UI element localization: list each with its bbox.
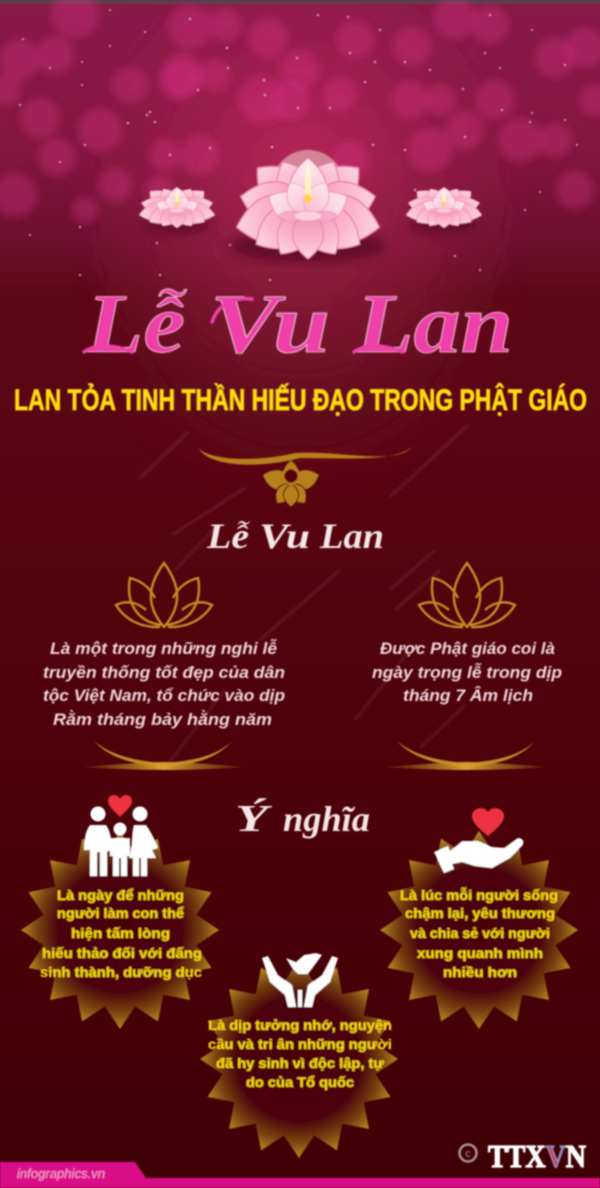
icon: gold lotus right [419, 563, 515, 627]
icon: central lotus [232, 150, 384, 263]
icon: hands with dove [262, 953, 338, 1007]
heading: Ý nghĩa: nghĩa [283, 799, 370, 839]
icon: right small lotus [403, 185, 485, 229]
text block: bottom burst [208, 1018, 392, 1090]
text block: right description: Được Phật giáo coi là [380, 640, 555, 658]
text block: left burst: Là ngày để những [57, 888, 184, 903]
heading: Lễ Vu Lan [206, 516, 384, 556]
text block: left burst [40, 888, 203, 980]
copyright logo: TTXVN: c [465, 1148, 471, 1160]
watermarks [140, 425, 468, 768]
text block: right description [372, 640, 562, 705]
text block: right description: ngày trọng lễ trong dịp [372, 662, 562, 682]
footer text: infographics.vn [17, 1167, 105, 1181]
heading: Lễ Vu Lan: Vu [259, 516, 310, 556]
top edge strip [0, 0, 600, 4]
copyright logo: TTXVN: TTXVN [488, 1138, 586, 1174]
heading: Ý nghĩa: Ý [235, 798, 273, 840]
lotus shadows [141, 218, 480, 262]
text block: left burst: hiện tấm lòng [71, 926, 170, 941]
text block: bottom burst: do của Tổ quốc [246, 1075, 355, 1090]
title: Lễ [85, 277, 188, 371]
panel: bottom petal burst [200, 960, 398, 1158]
text block: left description: tộc Việt Nam, tổ chức vào dịp [43, 687, 285, 705]
ornament: flourish with flower [199, 447, 412, 508]
text block: left description: truyền thống tốt đẹp của dân [43, 664, 285, 682]
text block: left burst: sinh thành, dưỡng dục [40, 965, 203, 980]
text block: left burst: hiếu thảo đối với đấng [42, 946, 202, 961]
heading: Lễ Vu Lan: Lễ [206, 516, 250, 556]
title: Vu [210, 277, 330, 371]
heading: Ý nghĩa [235, 798, 370, 840]
icon: family with heart [84, 795, 158, 876]
title: Lan [355, 277, 513, 371]
text block: right burst [400, 888, 558, 980]
text block: left description [43, 638, 285, 729]
icon: hand holding heart [434, 808, 523, 873]
panel: left petal burst [21, 831, 219, 1029]
sparkles [20, 10, 577, 280]
text block: right burst: xung quanh mình [417, 946, 543, 961]
text block: right burst: chậm lại, yêu thương [405, 906, 555, 921]
text block: right burst: và chia sẻ với người [410, 926, 550, 941]
bokeh lights [0, 0, 600, 223]
ornament: left swoosh [82, 741, 245, 770]
text block: right burst: nhiều hơn [443, 965, 517, 980]
text block: left burst: người làm con thể [57, 906, 185, 921]
text block: bottom burst: Là dịp tưởng nhớ, nguyện [208, 1018, 392, 1033]
text block: right description: tháng 7 Âm lịch [403, 686, 533, 705]
panel: right petal burst [380, 831, 578, 1029]
text block: right burst: Là lúc mỗi người sống [400, 888, 558, 903]
text block: bottom burst: đã hy sinh vì độc lập, tự [216, 1056, 384, 1071]
text block: bottom burst: cầu và tri ân những người [208, 1037, 392, 1052]
footer bar [0, 1162, 600, 1188]
title [84, 277, 513, 371]
background glow [0, 0, 600, 515]
text block: left description: Rằm tháng bảy hằng năm [53, 710, 272, 729]
heading: Lễ Vu Lan: Lan [319, 516, 384, 556]
icon: left small lotus [136, 185, 218, 229]
ornament: right swoosh [385, 741, 548, 770]
icon: gold lotus left [116, 563, 212, 627]
text block: left description: Là một trong những nghi lễ [50, 638, 278, 658]
